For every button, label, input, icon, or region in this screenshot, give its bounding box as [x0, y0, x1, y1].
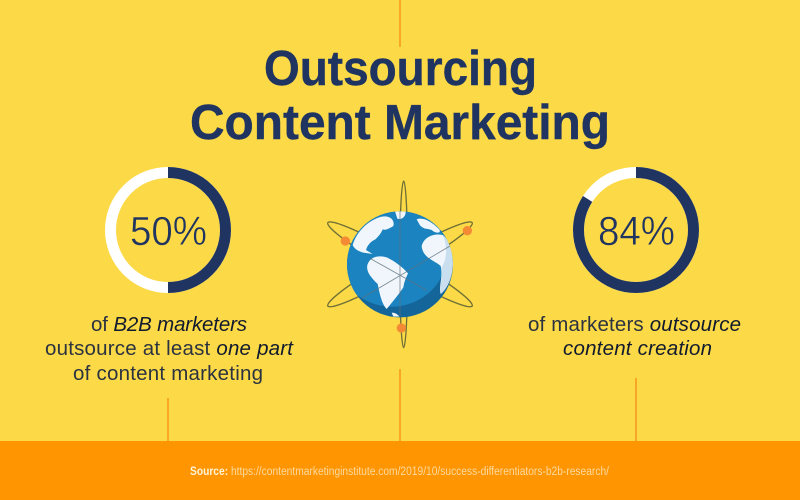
description: B2B marketers: of content marketing	[73, 362, 263, 385]
source citation: Source: https://contentmarketinginstitute.com/2019/10/success-differentiators-b2b-research/	[190, 466, 610, 478]
donut chart: 50%	[110, 172, 226, 288]
donut chart: 84%	[578, 172, 694, 288]
panel: 50% statistic	[45, 172, 294, 385]
orbit rings	[323, 181, 477, 348]
value: 84%: 84%	[598, 208, 675, 254]
description: B2B marketers	[45, 313, 294, 385]
icon: globe with orbits	[323, 181, 477, 348]
value: 50%: 50%	[130, 208, 207, 254]
title: Outsourcing	[264, 42, 537, 96]
orbit dots	[341, 226, 472, 333]
description: B2B marketers: of B2B marketers	[91, 313, 247, 336]
description: outsource content creation	[528, 313, 741, 360]
globe sphere	[347, 211, 453, 317]
axis lines	[362, 212, 450, 317]
light limb shading	[440, 235, 453, 294]
title: Content Marketing	[190, 96, 610, 150]
description: B2B marketers: outsource at least one part	[45, 337, 294, 360]
description: outsource content creation: content creation	[563, 337, 712, 360]
footer band	[0, 441, 800, 500]
description: outsource content creation: of marketers outsource	[528, 313, 741, 336]
title	[190, 42, 610, 150]
panel: 84% statistic	[528, 172, 741, 360]
continents	[353, 211, 453, 317]
